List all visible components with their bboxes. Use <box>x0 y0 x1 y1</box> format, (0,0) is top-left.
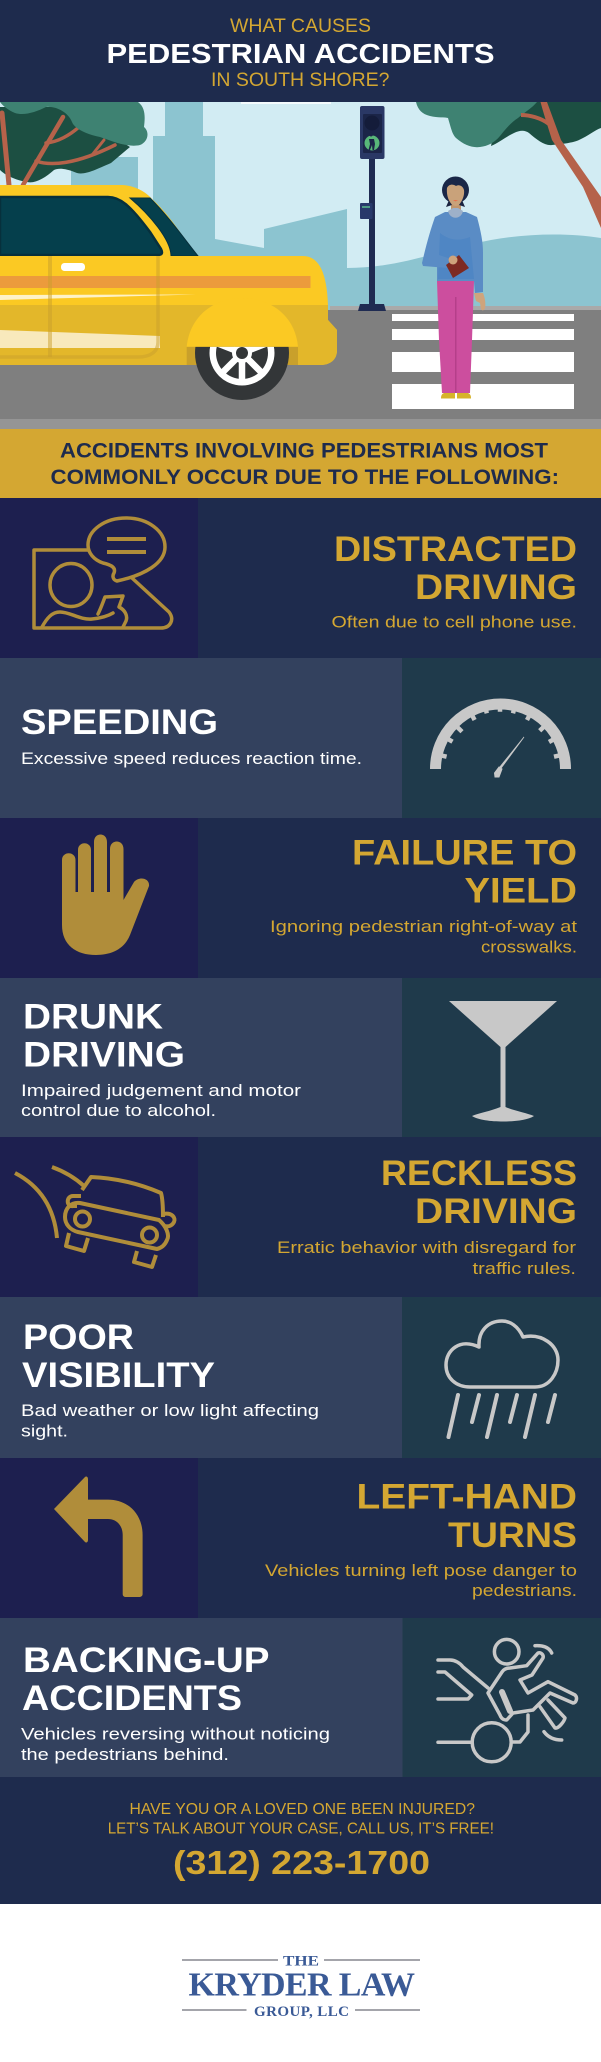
icon: phone user with speech bubble <box>34 518 172 628</box>
description line 2: crosswalks. <box>481 938 577 956</box>
panel: speeding <box>0 658 601 818</box>
description: Erratic behavior with disregard for <box>277 1239 577 1257</box>
crosswalk <box>392 314 574 409</box>
panel: drunk driving <box>0 978 601 1137</box>
call to action line 2: LET’S TALK ABOUT YOUR CASE, CALL US, IT’S FREE! <box>108 1820 494 1838</box>
call to action line 1: HAVE YOU OR A LOVED ONE BEEN INJURED? <box>130 1801 475 1818</box>
heading: DISTRACTED <box>334 530 577 569</box>
road <box>0 306 601 429</box>
header line: what causes: WHAT CAUSES <box>230 16 371 37</box>
title: PEDESTRIAN ACCIDENTS <box>106 38 495 69</box>
pedestrian signal <box>358 106 386 311</box>
icon: pedestrian hit by car <box>438 1639 576 1762</box>
heading: BACKING-UP <box>23 1641 270 1680</box>
heading line 2: DRIVING <box>415 568 577 607</box>
header panel <box>0 0 601 102</box>
description line 2: traffic rules. <box>472 1260 576 1278</box>
description: Vehicles reversing without noticing <box>21 1726 330 1744</box>
right tree <box>416 102 601 228</box>
heading: FAILURE TO <box>352 834 577 872</box>
description: Impaired judgement and motor <box>21 1082 302 1100</box>
description: Ignoring pedestrian right-of-way at <box>270 918 578 936</box>
description: Bad weather or low light affecting <box>21 1402 319 1420</box>
description line 2: control due to alcohol. <box>21 1102 216 1120</box>
panel: poor visibility <box>0 1297 601 1458</box>
heading line 2: DRIVING <box>415 1192 577 1231</box>
description line 2: pedestrians. <box>472 1582 577 1600</box>
panel: distracted driving <box>0 498 601 658</box>
description line 2: the pedestrians behind. <box>21 1746 229 1764</box>
heading line 2: TURNS <box>448 1516 577 1555</box>
panel: reckless driving <box>0 1137 601 1297</box>
description: Often due to cell phone use. <box>332 614 577 632</box>
banner line 1: ACCIDENTS INVOLVING PEDESTRIANS MOST <box>60 440 548 462</box>
heading line 2: VISIBILITY <box>22 1356 215 1395</box>
phone number: (312) 223-1700 <box>173 1844 430 1881</box>
panel: failure to yield <box>0 818 601 978</box>
heading: RECKLESS <box>381 1154 577 1193</box>
heading line 2: ACCIDENTS <box>22 1679 242 1718</box>
skyline <box>71 102 601 310</box>
heading: LEFT-HAND <box>356 1478 577 1516</box>
icon: stop hand <box>62 834 149 955</box>
heading line 2: DRIVING <box>23 1036 185 1074</box>
icon: skidding car <box>15 1167 175 1267</box>
car wheel <box>187 298 298 400</box>
logo: the kryder law group: GROUP, LLC <box>254 2004 349 2020</box>
icon: rain cloud <box>446 1321 558 1437</box>
heading: DRUNK <box>23 998 163 1036</box>
footer panel <box>0 1904 601 2062</box>
banner: intro statement <box>0 429 601 498</box>
heading line 2: YIELD <box>464 872 577 910</box>
street illustration <box>0 102 601 429</box>
heading: SPEEDING <box>21 703 218 742</box>
icon: left turn arrow <box>54 1477 143 1597</box>
panel: call to action <box>0 1777 601 1904</box>
pedestrian woman <box>422 176 485 398</box>
panel: backing-up accidents <box>0 1618 601 1777</box>
description: Excessive speed reduces reaction time. <box>21 750 362 768</box>
banner line 2: COMMONLY OCCUR DUE TO THE FOLLOWING: <box>50 466 559 489</box>
icon: martini glass <box>449 1001 557 1122</box>
description: Vehicles turning left pose danger to <box>265 1562 577 1580</box>
header line: location: IN SOUTH SHORE? <box>211 70 390 91</box>
logo: the kryder law group <box>182 1954 420 2020</box>
taxi car <box>0 185 337 365</box>
icon: speedometer <box>436 704 566 777</box>
panel: left-hand turns <box>0 1458 601 1618</box>
logo: the kryder law group: THE <box>283 1954 319 1970</box>
description line 2: sight. <box>21 1422 68 1440</box>
heading: POOR <box>23 1318 134 1357</box>
left tree <box>0 102 147 185</box>
logo: the kryder law group: KRYDER LAW <box>188 1966 415 2004</box>
